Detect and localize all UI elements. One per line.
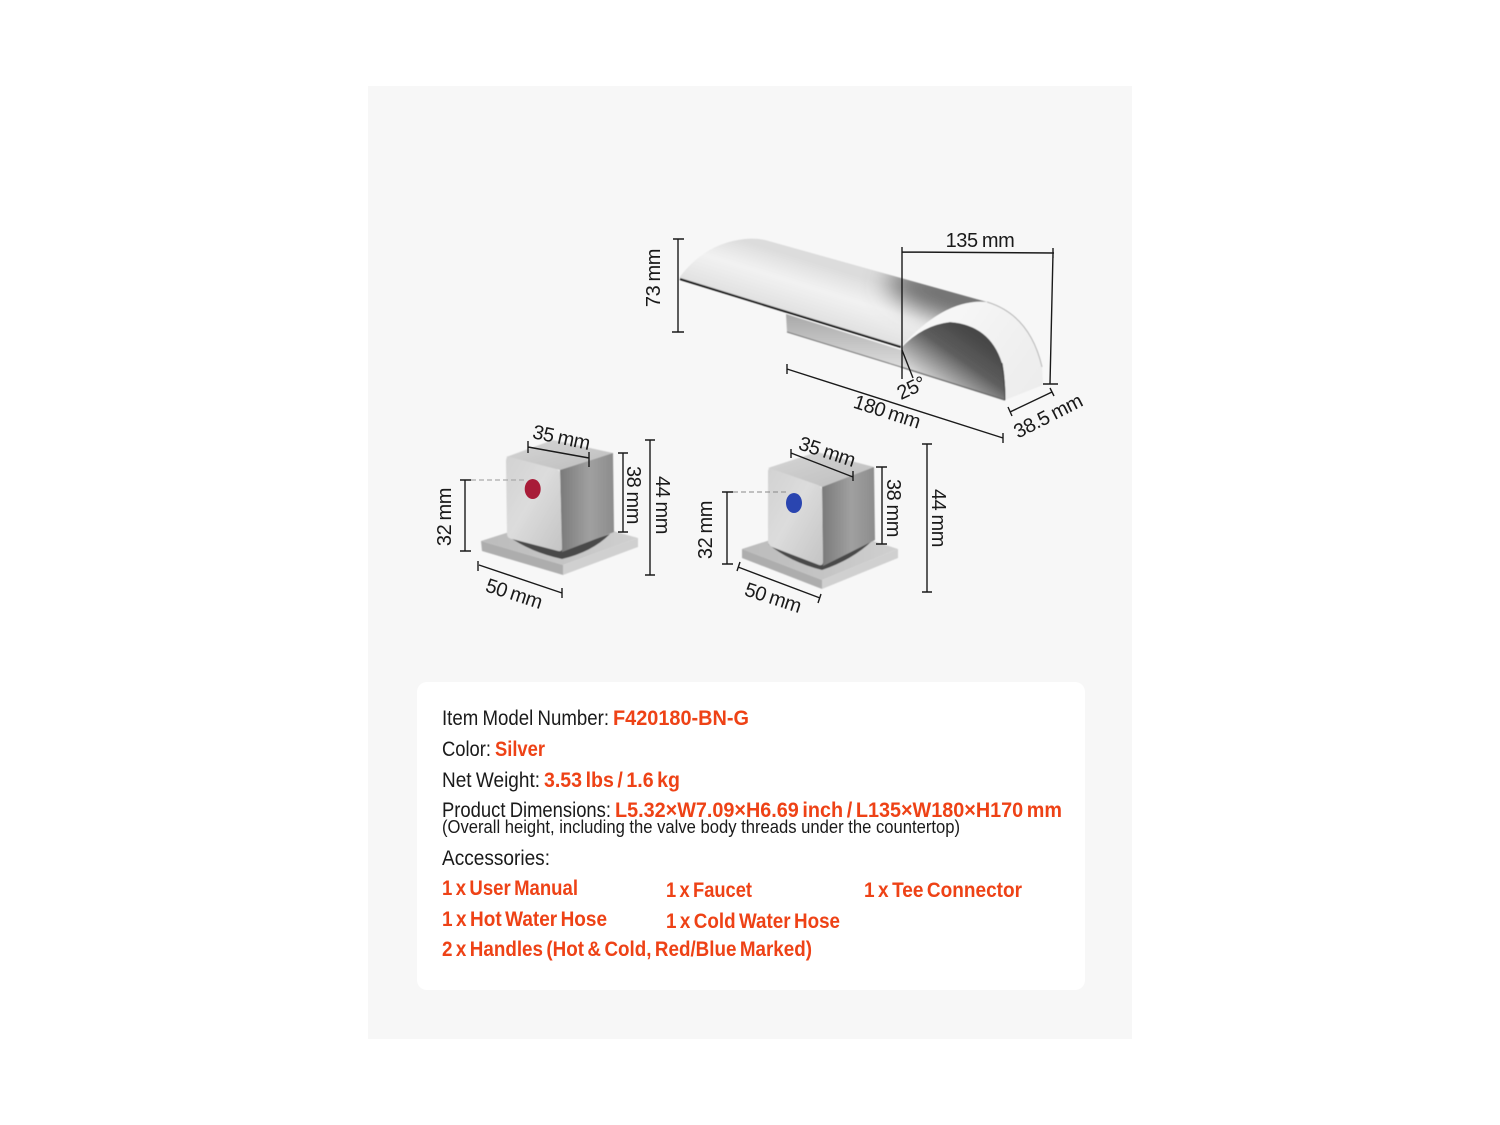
dimension: 25 degree angle: [894, 350, 929, 405]
dimension: 25 degree angle: 25°: [894, 372, 929, 405]
accessories list: 2 x Handles (Hot & Cold, Red/Blue Marked): [442, 938, 812, 961]
accessories list: 1 x Hot Water Hose: [442, 908, 607, 931]
dimension: 44 mm: 44 mm: [927, 489, 949, 547]
dimension: 135 mm: 135 mm: [946, 230, 1014, 252]
dimensions note: (Overall height, including the valve body threads under the countertop): [442, 817, 960, 837]
dimension: 50 mm: [478, 561, 562, 614]
net weight: 3.53 lbs / 1.6 kg: [544, 769, 680, 792]
dimension: 32 mm: [434, 480, 525, 551]
dimension: 38 mm: 38 mm: [882, 479, 904, 537]
dimension: 32 mm: 32 mm: [434, 488, 456, 546]
dimension: 44 mm: [645, 440, 673, 575]
icon: red marker: [525, 479, 541, 499]
dimension: 73 mm: 73 mm: [643, 249, 665, 307]
accessories heading: Accessories:: [442, 847, 550, 870]
dimension: 180 mm: 180 mm: [851, 391, 923, 433]
specification card: [417, 682, 1085, 990]
dimension: 32 mm: 32 mm: [695, 501, 717, 559]
dimension: 44 mm: [922, 444, 949, 592]
dimension: 50 mm: 50 mm: [742, 579, 804, 618]
hot water handle with dimensions: [434, 421, 673, 614]
dimension: 73 mm: [643, 239, 684, 332]
color: Color:: [442, 738, 491, 761]
product dimensions: L5.32×W7.09×H6.69 inch / L135×W180×H170 mm: [615, 799, 1062, 822]
dimension: 35 mm: 35 mm: [531, 421, 592, 455]
dimension: 38 mm: [876, 467, 904, 544]
product dimensions: Product Dimensions:: [442, 799, 611, 822]
net weight: Net Weight:: [442, 769, 540, 792]
accessories list: 1 x Faucet: [666, 879, 752, 902]
product dimensions: [442, 799, 1062, 822]
item model number: Item Model Number:: [442, 707, 609, 730]
icon: blue marker: [786, 493, 802, 513]
accessories list: 1 x Cold Water Hose: [666, 910, 840, 933]
background panel: [368, 86, 1132, 1039]
net weight: [442, 769, 680, 792]
dimension: 38 mm: [618, 453, 644, 532]
dimension: 50 mm: [737, 562, 821, 618]
dimension: 44 mm: 44 mm: [651, 476, 673, 534]
handle body: [481, 440, 638, 575]
accessories list: 1 x User Manual: [442, 877, 578, 900]
cold water handle with dimensions: [695, 433, 949, 618]
color: [442, 738, 545, 761]
color: Silver: [495, 738, 545, 761]
accessories list: 1 x Tee Connector: [864, 879, 1022, 902]
dimension: 38.5 mm: 38.5 mm: [1010, 390, 1086, 443]
accessories list: [442, 877, 1022, 961]
dimension: 38 mm: 38 mm: [622, 466, 644, 524]
dimension: 180 mm: [787, 364, 1003, 443]
dimension: 35 mm: 35 mm: [796, 433, 858, 472]
item model number: F420180-BN-G: [613, 707, 749, 730]
faucet body: [679, 239, 1043, 400]
dimension: 32 mm: [695, 492, 788, 564]
dimension: 50 mm: 50 mm: [483, 575, 545, 614]
item model number: [442, 707, 749, 730]
dimension: 135 mm: [902, 230, 1058, 384]
handle body: [742, 452, 898, 589]
faucet spout with dimensions: [643, 230, 1086, 443]
